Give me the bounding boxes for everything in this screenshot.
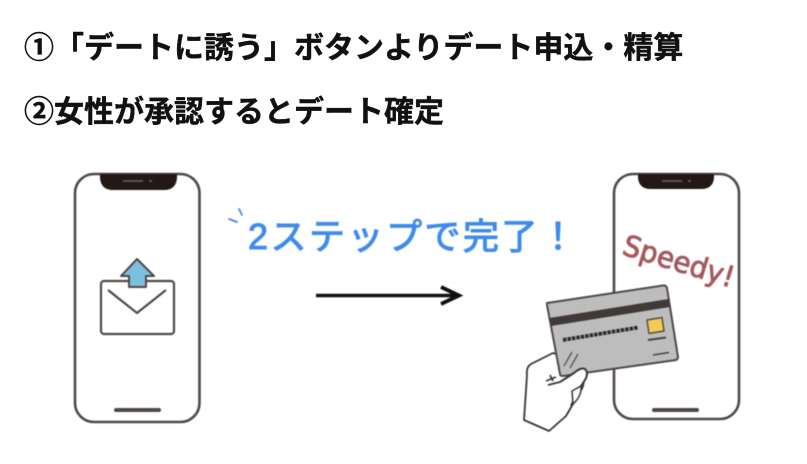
heading: step 2: ②女性が承認するとデート確定 (24, 96, 444, 129)
icon: right phone (614, 174, 739, 419)
credit card (547, 285, 678, 376)
text: Speedy!: Speedy! (619, 228, 739, 294)
icon: sparkle lines (229, 209, 242, 222)
heading: step 1: ①「デートに誘う」ボタンよりデート申込・精算 (24, 32, 683, 65)
icon: left phone (75, 174, 200, 422)
icon: envelope with upload arrow (101, 259, 174, 334)
arrow (316, 287, 459, 304)
icon: hand holding credit card (524, 285, 678, 431)
hand back (524, 353, 584, 431)
callout: two steps to complete: 2ステップで完了！ (248, 216, 576, 257)
thumb and fingers (560, 368, 587, 406)
